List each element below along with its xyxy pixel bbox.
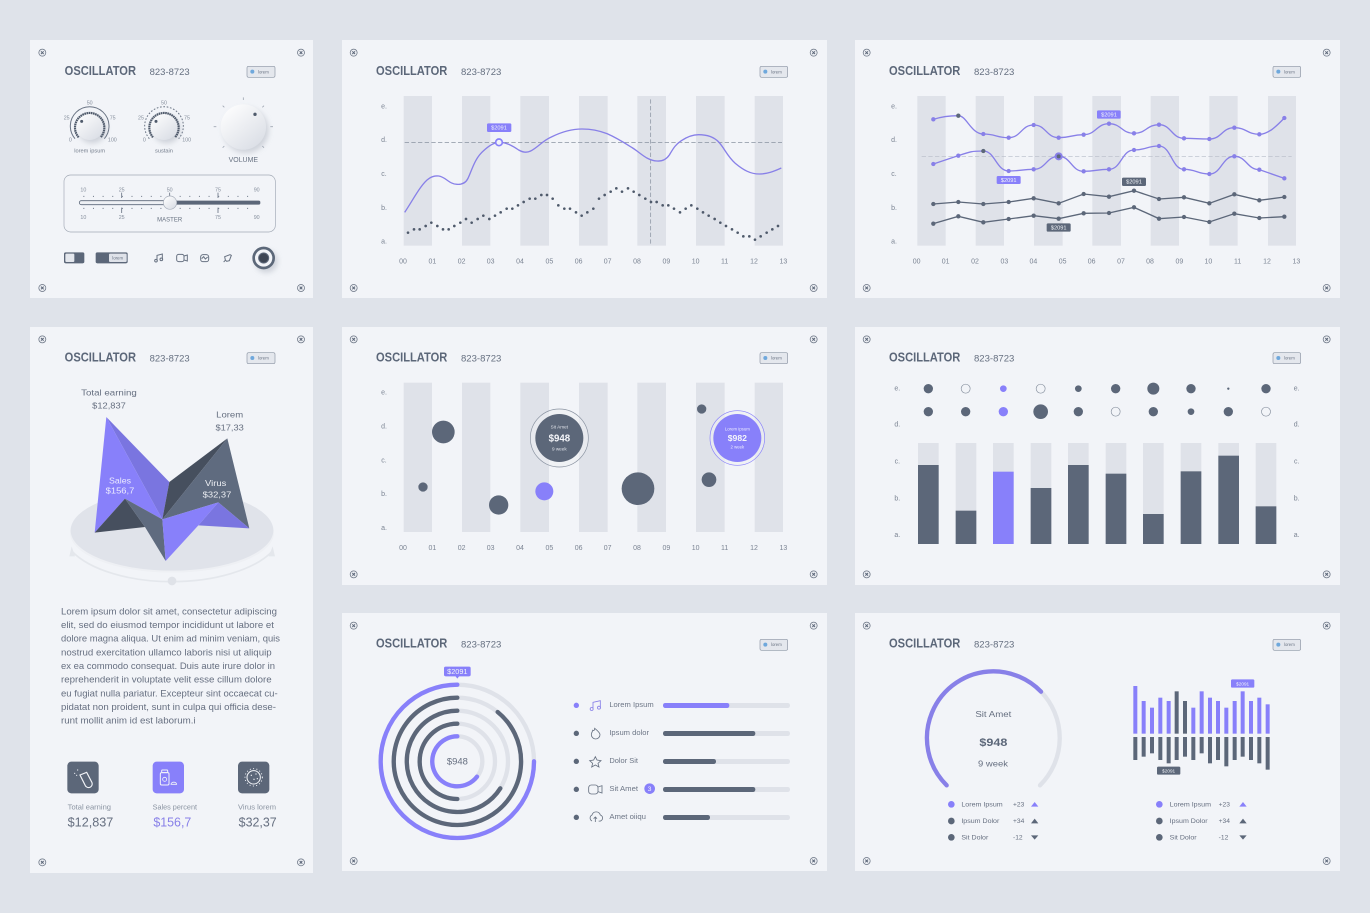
body paragraph: elit, sed do eiusmod tempor incididunt ut labore et — [61, 620, 274, 631]
heading — [889, 350, 1014, 364]
marker and tag — [487, 123, 511, 146]
knob: lorem ipsum: 50 — [87, 101, 93, 107]
y axis labels: e. — [381, 103, 387, 110]
x axis labels: 05 — [545, 259, 553, 266]
chart stripes — [404, 96, 783, 246]
row: sit amet: Sit Amet — [609, 786, 638, 793]
heading: OSCILLATOR — [376, 350, 447, 364]
label: total earning — [81, 388, 137, 411]
legend: gauge: +34 — [1013, 818, 1025, 825]
label: lorem: $17,33 — [215, 423, 244, 433]
body paragraph: pidatat non proident, sunt in culpa qui officia dese- — [61, 702, 276, 713]
reference line — [922, 155, 1292, 157]
panel: radial rings and list — [342, 613, 827, 871]
tag: dark: $2091 — [1162, 768, 1176, 773]
x axis labels: 04 — [1029, 259, 1037, 266]
lorem button: lorem — [771, 356, 782, 361]
lorem button — [1273, 353, 1301, 364]
panel: four line chart — [855, 40, 1340, 298]
callout: sit amet: 9 week — [552, 446, 567, 451]
left axis labels: e. — [894, 385, 900, 392]
x axis labels: 00 — [399, 259, 407, 266]
callout: lorem ipsum: 2 week — [730, 444, 745, 449]
x axis labels: 10 — [692, 545, 700, 552]
heading: OSCILLATOR — [65, 64, 136, 78]
legend: waveform: +34 — [1219, 818, 1230, 825]
heading: 823-8723 — [461, 640, 501, 650]
master slider: 50 — [167, 187, 173, 193]
knob: lorem ipsum — [64, 101, 117, 154]
x axis labels: 00 — [399, 545, 407, 552]
lorem button — [760, 66, 788, 77]
y axis labels: b. — [381, 205, 387, 212]
label: sales — [106, 475, 135, 495]
x axis labels: 11 — [1234, 259, 1241, 266]
tag: purple lower: $2091 — [1001, 178, 1017, 184]
x axis labels: 04 — [516, 259, 524, 266]
heading: OSCILLATOR — [376, 64, 447, 78]
heading — [65, 64, 190, 78]
callout: lorem ipsum — [710, 411, 765, 465]
x axis labels: 04 — [516, 545, 524, 552]
knob: lorem ipsum: lorem ipsum — [74, 148, 105, 154]
x axis labels: 06 — [575, 545, 583, 552]
body paragraph: reprehenderit in voluptate velit esse cillum dolore — [61, 675, 272, 686]
legend: waveform: Lorem Ipsum — [1170, 801, 1211, 808]
y axis labels: d. — [891, 137, 897, 144]
stat: sales percent — [153, 762, 197, 829]
stat: sales percent: $156,7 — [153, 815, 191, 829]
bar values — [918, 456, 1276, 544]
toggle: plain — [64, 252, 84, 263]
waveform: lower bars — [1133, 737, 1270, 770]
x axis labels: 08 — [1146, 259, 1154, 266]
knob: volume: VOLUME — [229, 155, 258, 164]
legend: waveform: Sit Dolor — [1170, 834, 1197, 841]
lorem button — [760, 639, 788, 650]
icon: video — [177, 254, 187, 262]
x axis labels: 06 — [1088, 259, 1096, 266]
base disk and arc — [69, 490, 275, 585]
lorem button: lorem — [771, 642, 782, 647]
master slider: 25 — [119, 215, 125, 221]
bubbles — [418, 404, 716, 515]
panel: 3d chart and summary — [30, 327, 313, 873]
x axis labels: 09 — [1175, 259, 1183, 266]
x axis labels: 05 — [1059, 259, 1067, 266]
x axis labels: 02 — [971, 259, 979, 266]
chart stripes — [404, 383, 783, 532]
legend: gauge: +23 — [1013, 801, 1025, 808]
master slider: 90 — [254, 187, 260, 193]
y axis labels: d. — [381, 423, 387, 430]
master slider: 75 — [215, 187, 221, 193]
x axis labels: 13 — [779, 259, 787, 266]
y axis labels: e. — [381, 390, 387, 397]
heading: OSCILLATOR — [376, 637, 447, 651]
heading: 823-8723 — [461, 353, 501, 363]
x axis labels: 13 — [779, 545, 787, 552]
lorem button — [760, 353, 788, 364]
icon: graph — [201, 255, 209, 262]
legend: waveform: +23 — [1219, 801, 1230, 808]
x axis labels: 07 — [1117, 259, 1125, 266]
tag — [444, 667, 471, 679]
y axis labels — [381, 390, 387, 532]
radial chart — [381, 685, 534, 838]
row: amet oiiqu — [574, 812, 790, 822]
row: lorem ipsum: Lorem Ipsum — [609, 702, 654, 709]
x axis labels: 06 — [575, 259, 583, 266]
heading: 823-8723 — [150, 67, 190, 77]
left axis labels: c. — [895, 459, 900, 466]
dot row e — [924, 383, 1271, 395]
x axis labels: 02 — [458, 545, 466, 552]
purple line 1 — [931, 113, 1286, 141]
knob: sustain: 100 — [182, 138, 191, 144]
y axis labels: d. — [381, 137, 387, 144]
right axis labels: c. — [1294, 459, 1299, 466]
stat: virus lorem: Virus lorem — [238, 802, 276, 811]
screws — [350, 49, 817, 291]
stat: total earning: $12,837 — [68, 815, 113, 829]
gauge text: Sit Amet — [975, 709, 1012, 719]
knob: sustain: sustain — [155, 148, 173, 154]
label: virus: $32,37 — [203, 490, 232, 500]
x axis labels: 01 — [942, 259, 950, 266]
stat: total earning: Total earning — [68, 802, 111, 811]
label: total earning: $12,837 — [92, 401, 126, 411]
x axis labels — [399, 259, 787, 266]
screws — [863, 622, 1330, 864]
y axis labels: b. — [891, 205, 897, 212]
x axis labels: 09 — [662, 545, 670, 552]
x axis labels: 08 — [633, 545, 641, 552]
knob: lorem ipsum: 100 — [108, 138, 117, 144]
heading — [889, 637, 1014, 651]
right axis labels — [1294, 385, 1300, 539]
legend: gauge: -12 — [1013, 834, 1023, 841]
x axis labels: 00 — [913, 259, 921, 266]
tag: dark lower: $2091 — [1051, 225, 1067, 231]
right axis labels: d. — [1294, 422, 1300, 429]
heading: 823-8723 — [150, 353, 190, 363]
heading: 823-8723 — [974, 67, 1014, 77]
left axis labels: d. — [894, 422, 900, 429]
chart stripes — [917, 96, 1296, 246]
heading: 823-8723 — [461, 67, 501, 77]
gauge — [927, 671, 1060, 785]
stat: virus lorem — [238, 762, 277, 829]
left axis labels: b. — [894, 495, 900, 502]
x axis labels: 07 — [604, 545, 612, 552]
heading — [889, 64, 1014, 78]
knob: sustain: 0 — [143, 138, 146, 144]
legend: waveform: -12 — [1219, 834, 1229, 841]
label: virus: Virus — [205, 478, 227, 488]
heading: 823-8723 — [974, 353, 1014, 363]
screws — [39, 49, 304, 291]
x axis labels: 03 — [487, 259, 495, 266]
x axis labels: 12 — [750, 545, 758, 552]
x axis labels: 01 — [428, 545, 436, 552]
tag: purple — [1231, 679, 1254, 688]
tag: $2091 — [447, 667, 468, 676]
purple line 2 — [931, 144, 1286, 180]
label: lorem: Lorem — [216, 410, 243, 420]
tag: purple top: $2091 — [1101, 112, 1117, 118]
panel: dots and bars — [855, 327, 1340, 585]
legend: gauge: Ipsum Dolor — [961, 818, 1000, 825]
screws — [39, 336, 304, 866]
icon: music — [155, 254, 163, 262]
legend: gauge — [948, 801, 1038, 841]
knob: lorem ipsum: 75 — [110, 115, 116, 121]
tag: purple lower — [997, 176, 1021, 184]
knob: sustain: 75 — [184, 115, 190, 121]
dark line 1 — [931, 188, 1286, 206]
gauge text: 9 week — [978, 759, 1009, 769]
label: virus — [203, 478, 232, 500]
label: lorem — [215, 410, 244, 433]
tag: purple top — [1097, 110, 1121, 119]
legend: gauge: Sit Dolor — [961, 834, 989, 841]
dot row d — [924, 404, 1270, 419]
knob: lorem ipsum: 0 — [69, 138, 72, 144]
tag: dark — [1157, 767, 1180, 775]
lorem button — [1273, 639, 1301, 650]
heading: OSCILLATOR — [889, 350, 960, 364]
row: sit amet — [574, 783, 790, 794]
row: ipsum dolor: Ipsum dolor — [609, 730, 650, 737]
master slider: 75 — [215, 215, 221, 221]
master slider: 10 — [80, 215, 86, 221]
toggle: lorem: lorem — [112, 255, 123, 260]
heading — [376, 64, 501, 78]
center value: $948 — [447, 757, 468, 767]
row: dolor sit: Dolor Sit — [609, 758, 638, 765]
y axis labels: e. — [891, 103, 897, 110]
row: lorem ipsum — [574, 701, 790, 710]
knob: volume — [214, 97, 273, 164]
callout: lorem ipsum: $982 — [728, 433, 747, 443]
x axis labels: 12 — [1263, 259, 1271, 266]
knob: sustain: 25 — [138, 115, 144, 121]
x axis labels: 12 — [750, 259, 758, 266]
tag: dark upper — [1122, 178, 1146, 186]
master slider: 10 — [80, 187, 86, 193]
row: amet oiiqu: Amet oiiqu — [609, 814, 646, 821]
y axis labels: a. — [891, 239, 897, 246]
knob: sustain — [138, 101, 191, 154]
x axis labels: 03 — [487, 545, 495, 552]
dark line 2 — [931, 205, 1286, 226]
purple line — [405, 129, 781, 212]
heading: OSCILLATOR — [889, 637, 960, 651]
x axis labels: 05 — [545, 545, 553, 552]
lorem button: lorem — [1284, 69, 1295, 74]
x axis labels: 03 — [1000, 259, 1008, 266]
dotted series — [408, 188, 778, 240]
panel: oscillator controls — [30, 40, 313, 298]
master slider: 25 — [119, 187, 125, 193]
x axis labels: 10 — [1204, 259, 1212, 266]
x axis labels — [913, 259, 1300, 266]
body paragraph — [61, 606, 280, 727]
crosshair — [405, 99, 782, 244]
stat: total earning — [67, 762, 113, 829]
screws — [863, 49, 1330, 291]
body paragraph: Lorem ipsum dolor sit amet, consectetur adipiscing — [61, 606, 277, 617]
x axis labels: 11 — [721, 259, 728, 266]
lorem button: lorem — [258, 356, 269, 361]
right axis labels: b. — [1294, 495, 1300, 502]
heading — [65, 350, 190, 364]
tag: dark lower — [1047, 223, 1071, 232]
screws — [350, 622, 817, 864]
gauge text — [975, 709, 1012, 769]
x axis labels: 08 — [633, 259, 641, 266]
y axis labels: a. — [381, 239, 387, 246]
marker and tag: $2091 — [491, 126, 507, 132]
knob: lorem ipsum: 25 — [64, 115, 70, 121]
x axis labels: 09 — [662, 259, 670, 266]
label: sales: $156,7 — [106, 485, 135, 495]
legend: gauge: Lorem Ipsum — [961, 801, 1003, 808]
panel: purple line and dotted chart — [342, 40, 827, 298]
y axis labels: c. — [891, 171, 897, 178]
callout: sit amet — [530, 409, 588, 467]
waveform: upper bars — [1133, 686, 1270, 734]
heading: OSCILLATOR — [65, 350, 136, 364]
row: sit amet: 3 — [648, 786, 652, 793]
audio jack — [254, 248, 274, 268]
left axis labels — [894, 385, 900, 539]
panel: bubble chart — [342, 327, 827, 585]
body paragraph: dolore magna aliqua. Ut enim ad minim veniam, quis — [61, 634, 280, 645]
body paragraph: eu fugiat nulla pariatur. Excepteur sint occaecat cu- — [61, 688, 278, 699]
x axis labels: 11 — [721, 545, 728, 552]
lorem button — [247, 353, 275, 364]
stat: sales percent: Sales percent — [153, 802, 197, 811]
y axis labels: a. — [381, 525, 387, 532]
heading — [376, 637, 501, 651]
legend: waveform — [1156, 801, 1247, 841]
row: dolor sit — [574, 757, 790, 767]
screws — [863, 336, 1330, 578]
screws — [350, 336, 817, 578]
callout: sit amet: $948 — [549, 433, 571, 444]
gauge text: $948 — [979, 737, 1007, 749]
label: sales: Sales — [109, 475, 132, 485]
heading — [376, 350, 501, 364]
left axis labels: a. — [894, 532, 900, 539]
icon: rocket — [224, 255, 231, 262]
bar tracks — [918, 443, 1276, 544]
right axis labels: a. — [1294, 532, 1300, 539]
x axis labels: 01 — [428, 259, 436, 266]
x axis labels: 02 — [458, 259, 466, 266]
lorem button: lorem — [1284, 356, 1295, 361]
x axis labels: 07 — [604, 259, 612, 266]
lorem button: lorem — [258, 69, 269, 74]
y axis labels: c. — [381, 171, 387, 178]
heading: OSCILLATOR — [889, 64, 960, 78]
master slider: 90 — [254, 215, 260, 221]
tag: dark upper: $2091 — [1126, 180, 1142, 186]
master slider — [64, 175, 275, 232]
y axis labels — [891, 103, 897, 246]
right axis labels: e. — [1294, 385, 1300, 392]
y axis labels: b. — [381, 491, 387, 498]
label: total earning: Total earning — [81, 388, 137, 398]
lorem button — [247, 66, 275, 77]
row: ipsum dolor — [574, 728, 790, 739]
x axis labels: 10 — [692, 259, 700, 266]
body paragraph: runt mollit anim id est laborum.i — [61, 716, 196, 727]
x axis labels: 13 — [1292, 259, 1300, 266]
heading: 823-8723 — [974, 640, 1014, 650]
master slider: MASTER — [157, 218, 183, 224]
tag: purple: $2091 — [1236, 681, 1250, 686]
lorem button: lorem — [771, 69, 782, 74]
x axis labels — [399, 545, 787, 552]
lorem button — [1273, 66, 1301, 77]
y axis labels: c. — [381, 457, 387, 464]
knob: sustain: 50 — [161, 101, 167, 107]
stat: virus lorem: $32,37 — [239, 815, 277, 829]
3d polygon chart — [95, 417, 249, 561]
callout: lorem ipsum: Lorem ipsum — [725, 426, 750, 431]
body paragraph: ex ea commodo consequat. Duis aute irure dolor in — [61, 661, 275, 672]
callout: sit amet: Sit Amet — [551, 425, 569, 430]
legend: waveform: Ipsum Dolor — [1170, 818, 1208, 825]
body paragraph: nostrud exercitation ullamco laboris nisi ut aliquip — [61, 647, 272, 658]
lorem button: lorem — [1284, 642, 1295, 647]
toggle: lorem — [96, 252, 128, 263]
y axis labels — [381, 103, 387, 246]
panel: gauge and waveform — [855, 613, 1340, 871]
